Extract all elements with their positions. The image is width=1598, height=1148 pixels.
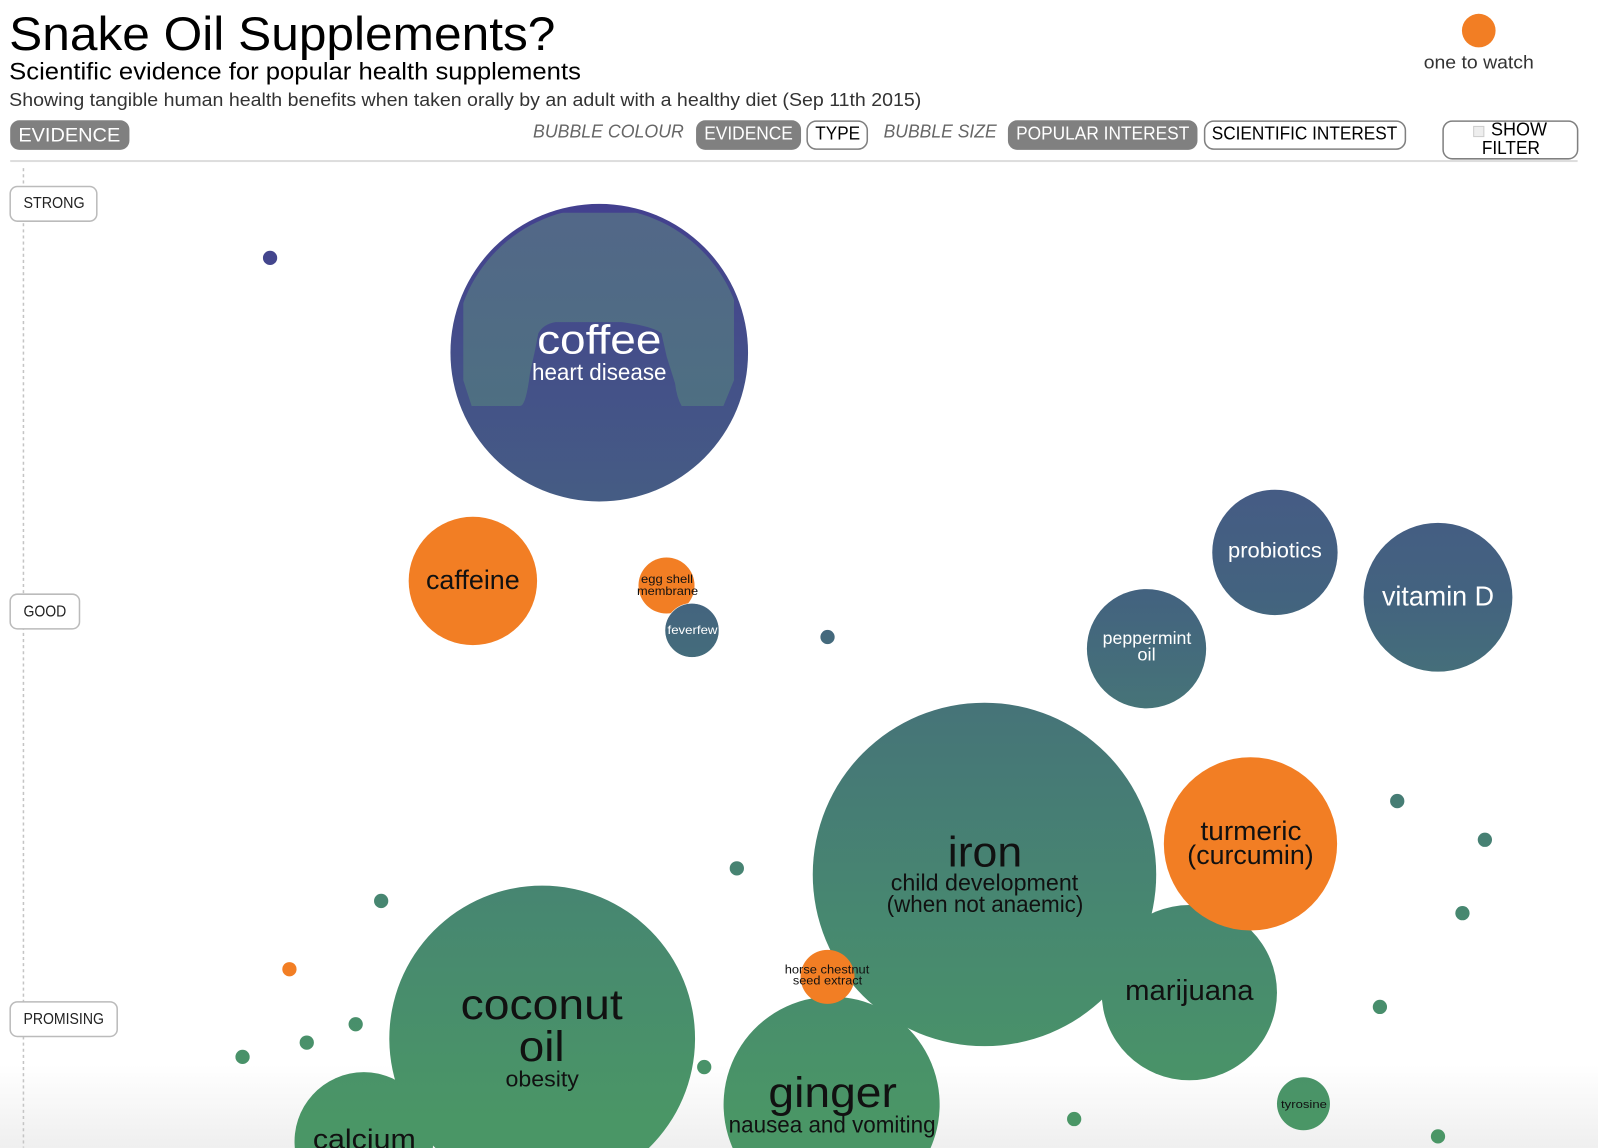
bubble: ginger: ginger [768,1069,897,1117]
button: colour by evidence [696,120,801,150]
bubble: probiotics: probiotics [1228,538,1322,562]
y axis button: evidence [10,120,129,150]
bubble: iron: child development [891,870,1079,896]
bubble: horse chestnut seed extract [785,950,870,1004]
bubble: iron: iron [948,828,1022,876]
bubble: peppermint oil: peppermint [1103,628,1192,648]
button: colour by type [807,121,867,149]
button: show filter: FILTER [1482,137,1540,158]
axis label: good: GOOD [23,604,66,621]
bubble: caffeine [409,517,537,645]
bubble: iron: (when not anaemic) [887,891,1083,917]
bubble: vitamin D [1364,523,1512,672]
bubble: calcium [295,1072,433,1148]
bubble: egg shell membrane: membrane [637,584,698,598]
bubble: feverfew [665,603,719,657]
button: colour by type: TYPE [815,123,860,144]
bubble: probiotics [1212,490,1338,615]
bubble: peppermint oil: oil [1137,644,1156,664]
axis label: promising: PROMISING [23,1011,104,1028]
button: size by scientific interest: SCIENTIFIC INTEREST [1212,123,1397,144]
bubble: tyrosine [1277,1077,1330,1130]
bubble: marijuana: marijuana [1125,975,1254,1007]
y axis button: evidence: EVIDENCE [18,125,120,147]
bubble: feverfew: feverfew [668,623,718,637]
button: show filter: SHOW [1491,119,1548,140]
label: bubble size: BUBBLE SIZE [884,121,997,142]
bubble: horse chestnut seed extract: horse chestnut [785,963,870,976]
bubble: coffee: coffee [537,317,661,363]
bubble: egg shell membrane: egg shell [641,572,693,586]
bubble: horse chestnut seed extract: seed extract [793,975,863,988]
axis label: good [10,594,79,629]
button: colour by evidence: EVIDENCE [704,123,793,144]
button: size by popular interest: POPULAR INTEREST [1016,123,1189,144]
bubble: coconut oil: obesity [505,1066,580,1091]
bubble: coconut oil: oil [519,1023,565,1071]
bubble: coffee: heart disease [532,359,667,385]
bubble: ginger: nausea and vomiting [729,1111,936,1137]
bubble: tyrosine: tyrosine [1281,1099,1327,1111]
bubble: ginger [724,997,940,1148]
axis label: promising [10,1002,117,1036]
button: show filter [1443,119,1578,159]
bubble: iron [813,703,1156,1046]
bubble: coffee [450,204,748,501]
button: size by popular interest [1008,120,1197,150]
bubble: coconut oil: coconut [461,981,623,1029]
subtitle: Scientific evidence for popular health supplements [9,59,581,86]
bubble: egg shell membrane [637,557,698,614]
legend: one to watch: one to watch [1424,51,1534,72]
axis label: strong: STRONG [23,195,85,212]
bubble: caffeine: caffeine [426,565,520,595]
title: Snake Oil Supplements? [9,8,555,60]
axis label: strong [10,187,97,221]
small unlabelled bubbles [235,251,1492,1143]
legend: one to watch [1424,14,1534,72]
description: Showing tangible human health benefits when taken orally by an adult with a healthy diet (Sep 11th 2015) [9,89,921,110]
bubble: marijuana [1102,905,1277,1080]
bubble: coconut oil [389,886,695,1148]
bubble: turmeric (curcumin): (curcumin) [1187,840,1314,870]
bubble: vitamin D: vitamin D [1382,580,1494,611]
bubble: peppermint oil [1087,589,1206,708]
bubble: turmeric (curcumin) [1164,757,1337,930]
label: bubble colour: BUBBLE COLOUR [533,121,684,142]
bubble: turmeric (curcumin): turmeric [1201,816,1301,846]
